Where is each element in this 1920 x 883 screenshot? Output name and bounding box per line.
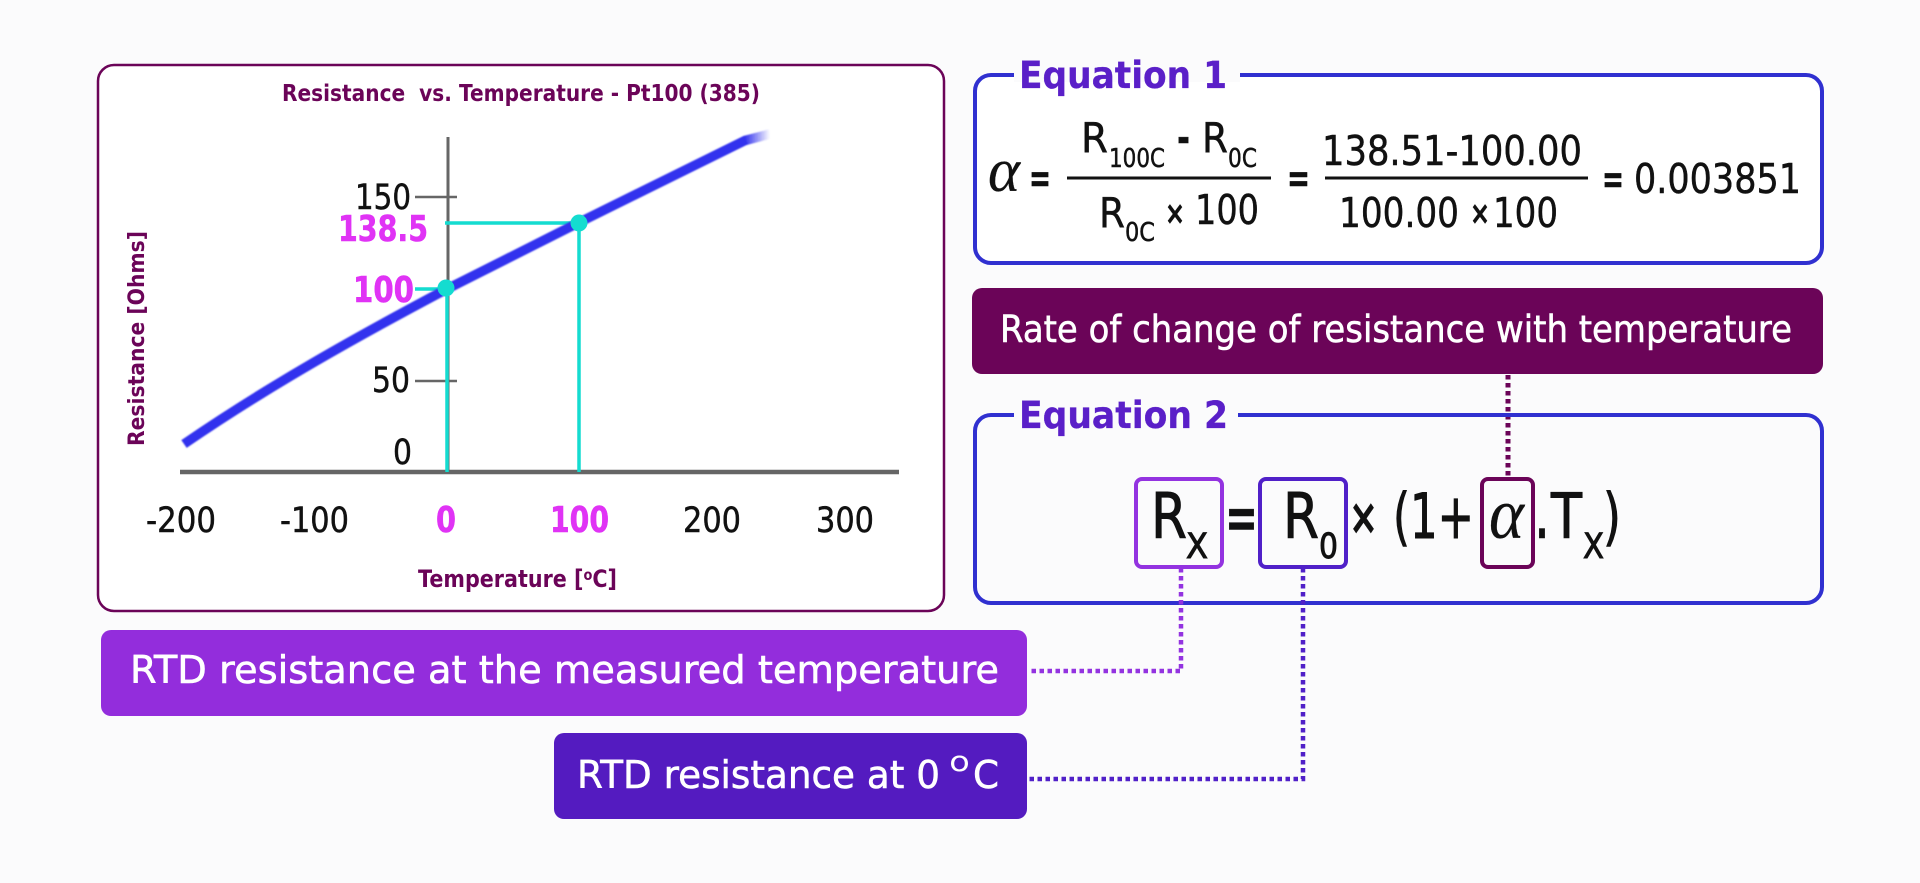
heading: equation 2: Equation 2: [1019, 394, 1228, 437]
axes: [180, 137, 899, 472]
label: RTD resistance at 0 C: C: [973, 753, 999, 797]
y axis tick labels: 100: [353, 270, 414, 311]
fraction 2: [1322, 127, 1588, 237]
y axis tick labels: 0: [393, 433, 412, 473]
panel: equation 2: [975, 394, 1822, 603]
cyan guide lines: [415, 223, 579, 472]
box: R0: R: [1283, 480, 1319, 553]
x axis tick labels: -100: [280, 501, 349, 541]
panel: equation 1: [975, 54, 1822, 263]
temperature term: .: [1536, 492, 1548, 550]
x axis tick labels: 100: [550, 500, 609, 541]
label: RTD resistance at 0 C: RTD resistance at 0: [577, 753, 940, 797]
fraction 1: R: [1081, 114, 1108, 162]
fraction 2: 100.00: [1339, 189, 1459, 237]
box: Rx: X: [1186, 527, 1208, 567]
y axis tick labels: [338, 178, 428, 473]
x axis label: Temperature [: [418, 565, 610, 593]
connector: Rx to label: [1029, 568, 1181, 671]
label: rate of change: Rate of change of resistance with temperature: [1000, 308, 1792, 351]
y axis label: Resistance [Ohms]: [125, 231, 150, 446]
fraction 1: ×: [1165, 194, 1185, 232]
label: RTD resistance at measured temperature: [101, 630, 1027, 716]
label: RTD resistance at measured temperature: RTD resistance at the measured temperature: [130, 648, 999, 692]
fraction 1: R: [1202, 114, 1228, 162]
alpha symbol: α: [988, 137, 1021, 205]
label: RTD resistance at 0 C: [554, 733, 1027, 819]
chart title: Resistance vs. Temperature - Pt100 (385): [282, 81, 760, 107]
box: alpha: [1482, 474, 1533, 567]
y axis tick labels: 150: [355, 178, 411, 218]
fraction 1: 100: [1195, 186, 1259, 234]
x axis tick labels: 0: [436, 500, 456, 541]
fraction 1: 0C: [1228, 144, 1257, 174]
fraction 1: 0C: [1125, 218, 1155, 248]
heading: equation 1: Equation 1: [1019, 54, 1227, 97]
y axis tick labels: 50: [372, 361, 410, 401]
fraction 2: 138.51-100.00: [1322, 127, 1582, 175]
box: Rx: [1136, 479, 1222, 567]
x axis tick labels: 200: [683, 501, 741, 541]
x axis tick labels: [146, 500, 874, 541]
result: 0.003851: [1634, 155, 1801, 203]
fraction 2: ×: [1470, 194, 1490, 232]
box: R0: [1260, 479, 1346, 567]
temperature term: T: [1550, 480, 1583, 553]
equals: =: [1029, 156, 1051, 202]
fraction 1: [1067, 114, 1271, 248]
temperature term: [1536, 480, 1621, 567]
temperature term: ): [1603, 480, 1621, 553]
temperature term: X: [1583, 527, 1604, 567]
equals: =: [1225, 483, 1258, 553]
fraction 1: -: [1177, 114, 1190, 162]
panel: equation 2: (1+: [1393, 480, 1474, 553]
x axis tick labels: -200: [146, 501, 216, 541]
fraction 1: 100C: [1109, 144, 1165, 174]
panel: resistance vs temperature chart: [98, 65, 944, 611]
y axis tick labels: 138.5: [338, 209, 428, 250]
x axis label: C]: [592, 565, 617, 593]
fraction 2: 100: [1493, 189, 1558, 237]
multiply and bracket: ×: [1349, 488, 1378, 546]
x axis tick labels: 300: [816, 501, 874, 541]
label: RTD resistance at 0 C: O: [950, 752, 969, 776]
x axis label: o: [583, 566, 592, 584]
fraction 1: R: [1099, 189, 1125, 237]
box: R0: 0: [1319, 527, 1338, 567]
connector: R0 to label: [1029, 568, 1303, 779]
box: Rx: R: [1151, 480, 1187, 553]
result: =: [1602, 157, 1624, 203]
connector: alpha to rate label: [1506, 375, 1510, 479]
resistance curve: [184, 134, 770, 444]
data points: [438, 214, 588, 296]
label: rate of change: [972, 288, 1823, 374]
box: alpha: α: [1489, 474, 1525, 554]
equals: =: [1287, 156, 1310, 202]
